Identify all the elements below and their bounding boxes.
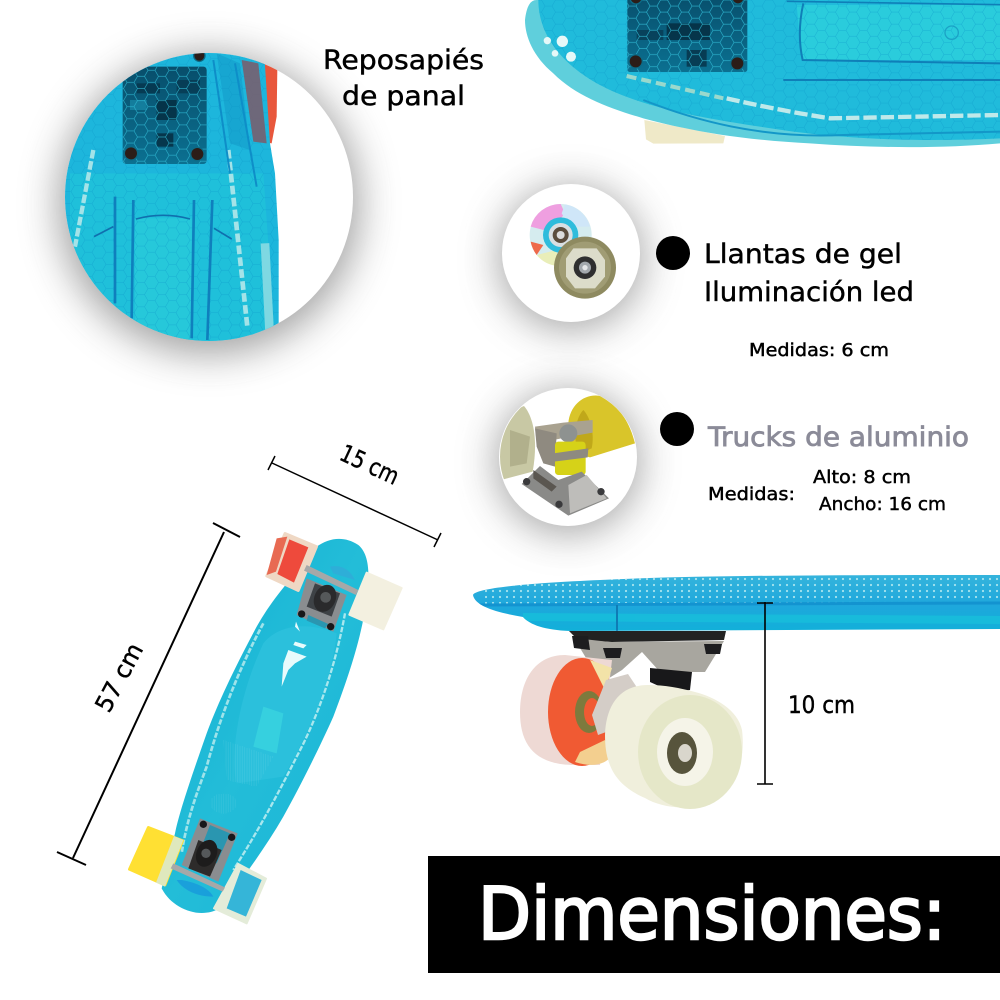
- heading: Reposapiés de panal: [323, 45, 484, 112]
- truck: top: [297, 565, 358, 632]
- truck side: [569, 631, 726, 692]
- deck: [162, 539, 368, 913]
- bullet: gel wheels: [656, 236, 690, 270]
- text: truck sizes: Alto: 8 cm: [813, 467, 911, 488]
- dimension: 15 cm: 15 cm: [335, 439, 403, 491]
- dimension: 10 cm: 10 cm: [788, 691, 855, 719]
- wheel: white: [349, 573, 402, 629]
- wheel: front white: [605, 685, 743, 809]
- icon: LED and gel wheels: [530, 204, 616, 299]
- photo: skateboard side view: [473, 575, 1000, 809]
- banner: Dimensiones: [428, 856, 1000, 973]
- panel: aluminium trucks circle: [496, 388, 640, 534]
- dimension: 10 cm: [757, 602, 855, 784]
- panel: honeycomb detail circle: [50, 40, 359, 360]
- text: Trucks de aluminio: Trucks de aluminio: [707, 422, 969, 453]
- photo: top deck close-up: [525, 0, 1000, 147]
- text: Llantas de gel, Iluminación led: Llantas de gel: [704, 239, 902, 270]
- text: truck sizes: Medidas:: [708, 484, 795, 505]
- wheel: blue: [214, 864, 266, 923]
- text: truck sizes: [708, 467, 946, 515]
- dimension: 57 cm: 57 cm: [90, 638, 149, 717]
- text: truck sizes: Ancho: 16 cm: [819, 494, 946, 515]
- panel: gel wheels circle: [499, 184, 643, 330]
- dimension: 57 cm: [57, 523, 240, 865]
- bullet: trucks: [660, 412, 694, 446]
- wheel: yellow: [129, 827, 183, 887]
- text: wheel size: Medidas: 6 cm: [749, 341, 889, 361]
- text: Llantas de gel, Iluminación led: [704, 239, 914, 308]
- wheel: rear orange: [520, 655, 616, 766]
- wheel: red: [267, 533, 317, 591]
- text: Llantas de gel, Iluminación led: Iluminación led: [704, 277, 914, 308]
- truck: bottom: [171, 818, 238, 892]
- heading: Reposapiés de panal: de panal: [342, 81, 465, 112]
- icon: truck with yellow wheel: [498, 396, 635, 516]
- dimension: 15 cm: [268, 439, 441, 547]
- heading: Reposapiés de panal: Reposapiés: [323, 45, 484, 76]
- photo: skateboard top view: [129, 533, 402, 923]
- deck side: [473, 575, 1000, 632]
- banner: Dimensiones: Dimensiones:: [478, 872, 946, 956]
